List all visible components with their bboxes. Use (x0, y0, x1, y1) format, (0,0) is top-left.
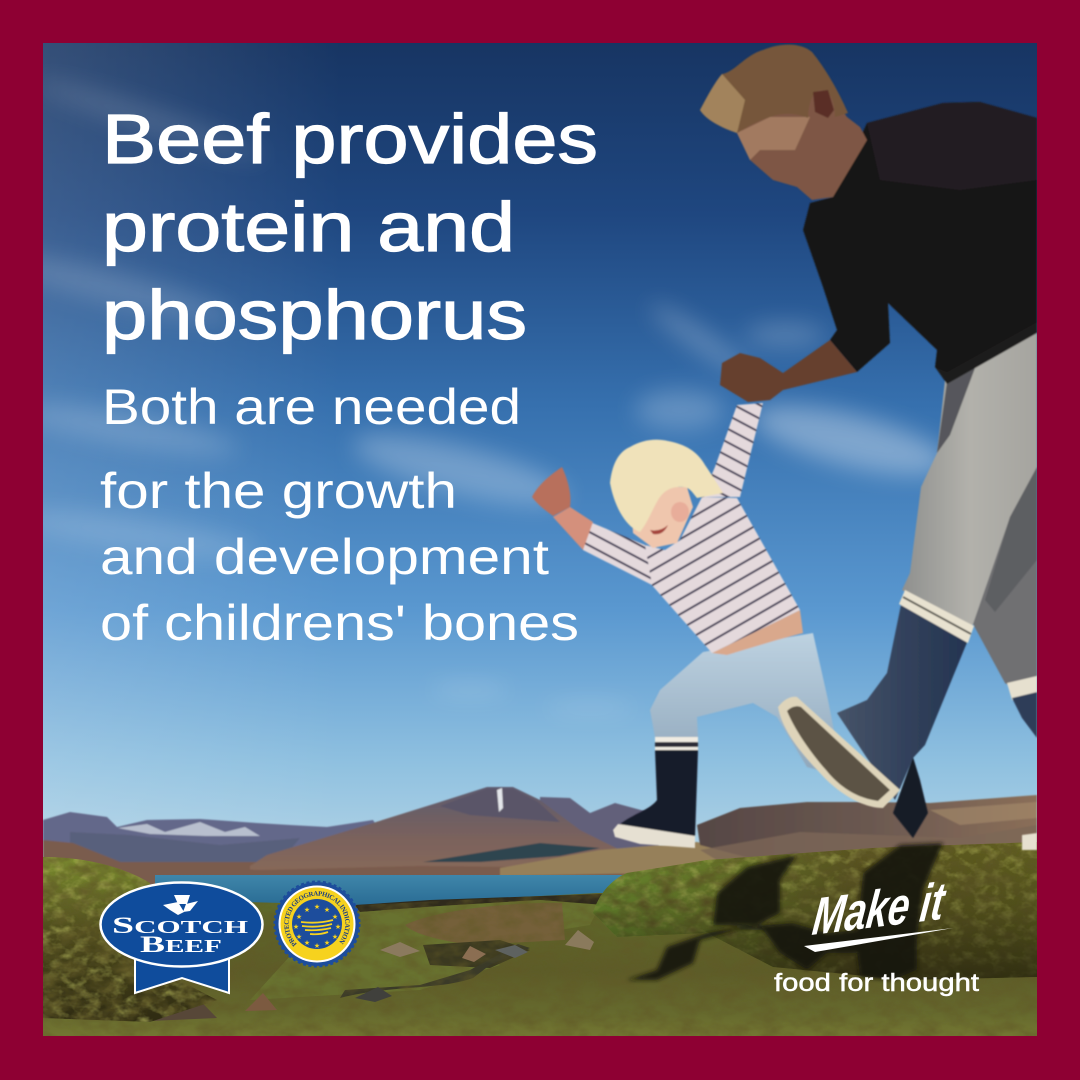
ear (813, 90, 834, 118)
face (630, 487, 693, 548)
sea loch (155, 875, 630, 905)
main peak (250, 786, 616, 870)
grey trousers (902, 333, 1037, 627)
left mossy mound (43, 857, 217, 1022)
foreground grass (43, 893, 1037, 1036)
back boot sole (1022, 833, 1037, 850)
cast shadows of figures (627, 843, 943, 980)
heading (102, 100, 598, 354)
dark shoreline (356, 894, 602, 912)
near-left hill and foothills (43, 840, 624, 875)
logo: Make it food for thought (774, 871, 979, 997)
ribbon (135, 955, 229, 993)
black sweater (803, 102, 1037, 372)
body text (100, 463, 579, 651)
striped top (645, 497, 800, 653)
grass texture (43, 893, 1037, 1036)
child (532, 403, 842, 848)
logo: Scotch Beef (100, 882, 262, 993)
body text: for the growth (100, 463, 457, 519)
oval badge (100, 882, 262, 966)
heading: Beef provides (102, 100, 598, 178)
stars: ★ (304, 939, 310, 947)
blue centre (292, 899, 342, 949)
outstretched arm (553, 507, 593, 550)
cheek and smile (650, 502, 689, 534)
stars (293, 903, 341, 950)
stars: ★ (296, 913, 302, 921)
hair (700, 45, 848, 133)
stars: ★ (304, 906, 310, 914)
heading: protein and (102, 188, 515, 266)
left snowy range (43, 811, 375, 848)
rear boot heel (893, 757, 928, 838)
bare waist (712, 610, 803, 655)
man (700, 45, 1037, 850)
body text: of childrens' bones (100, 595, 579, 651)
child's boot (618, 750, 698, 838)
stars: ★ (332, 913, 338, 921)
rocks (150, 930, 594, 1021)
stars: ★ (296, 933, 302, 941)
lowered sleeve (583, 522, 652, 585)
ring text: PROTECTED GEOGRAPHICAL INDICATION (284, 891, 350, 947)
tan lower hill (500, 842, 760, 876)
small peaks behind child's boot (540, 797, 660, 850)
blond hair (610, 440, 723, 532)
wordmark: B EEF (140, 932, 222, 957)
dark hollow (423, 940, 530, 968)
body text: and development (100, 529, 549, 585)
stars: ★ (314, 903, 320, 911)
back leg (960, 460, 1037, 706)
stars: ★ (332, 933, 338, 941)
head and face (737, 80, 867, 200)
yellow ring (280, 888, 354, 960)
boot sole (778, 697, 900, 808)
stars: ★ (335, 923, 341, 931)
tagline: food for thought (774, 969, 979, 997)
stars: ★ (293, 923, 299, 931)
thistle icon (163, 895, 198, 915)
right mossy bank (593, 842, 1037, 980)
stars: ★ (314, 942, 320, 950)
bare earth patch (405, 903, 565, 945)
logo: PGI seal (274, 880, 360, 968)
Make it script: Make it (810, 871, 950, 947)
rubber boot (778, 590, 974, 808)
green slope (250, 900, 600, 1000)
sky with clouds (0, 43, 1037, 903)
subheading: Both are needed (102, 379, 521, 435)
field furrows (301, 920, 333, 934)
base land fill (120, 861, 256, 885)
boot cuff stripes (655, 737, 698, 752)
swoosh underline (804, 928, 953, 952)
dark forest patch (423, 843, 600, 862)
raised sleeve (702, 403, 763, 497)
serrated edge (275, 882, 359, 966)
right ridge (697, 795, 1037, 860)
jeans (650, 633, 842, 773)
stars: ★ (324, 906, 330, 914)
fist (532, 467, 571, 516)
forearm and hands (720, 340, 857, 402)
distant mountains (43, 787, 1037, 895)
stars: ★ (324, 939, 330, 947)
heading: phosphorus (102, 276, 527, 354)
wordmark: S COTCH (112, 913, 248, 938)
belt (935, 318, 1037, 384)
wordmark (112, 913, 248, 957)
